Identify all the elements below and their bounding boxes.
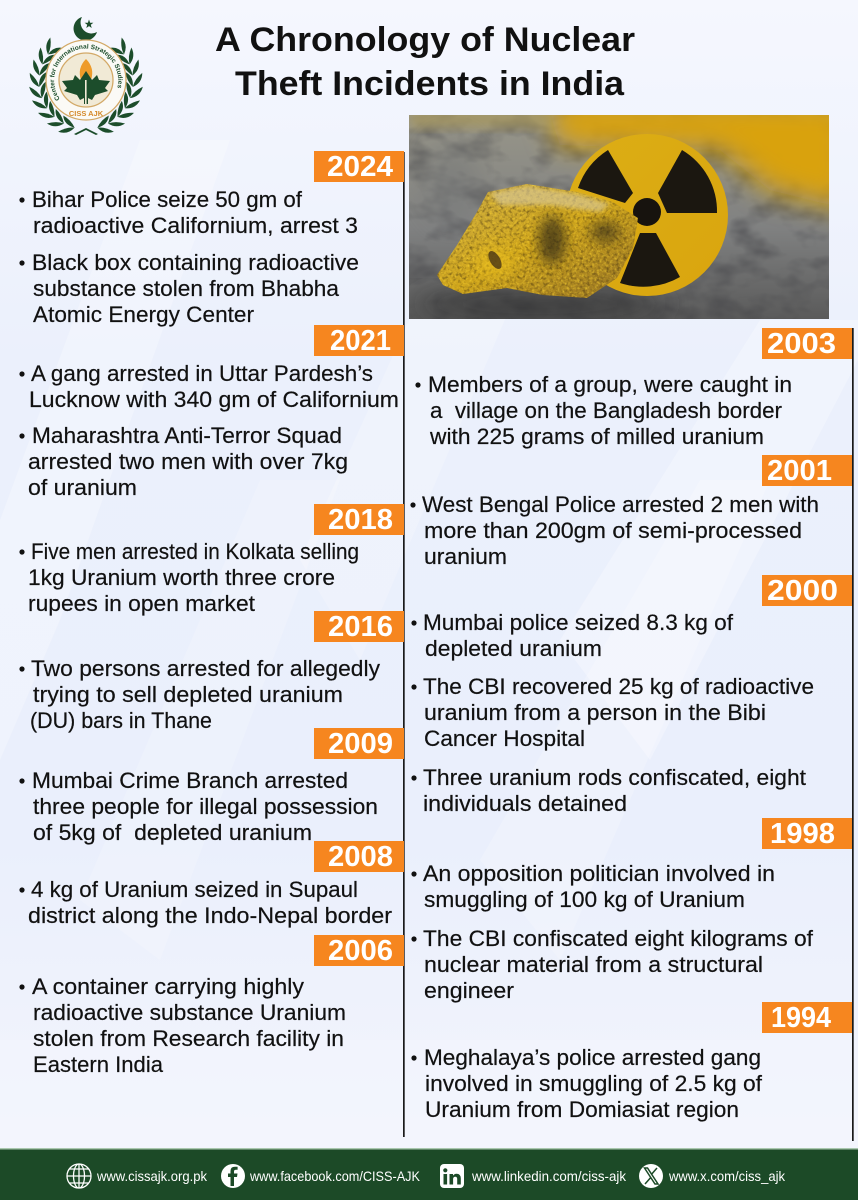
- entry: container: [19, 974, 346, 1077]
- entry: Thane: [19, 656, 381, 733]
- entry: CBI Bibi Cancer Hospital: Cancer Hospital: [424, 726, 585, 751]
- entry: Mumbai police: depleted uranium: [425, 636, 602, 661]
- logo: CISS AJK emblem: [29, 17, 143, 135]
- year 2009: 2009: [328, 728, 393, 760]
- entry: Bangladesh border: with 225 grams of milled uranium: [429, 424, 764, 449]
- entry: Black box: Atomic Energy Center: [33, 302, 255, 327]
- year 2008: 2008: [328, 841, 393, 873]
- entry: Maharashtra ATS: Maharashtra Anti-Terror Squad: [32, 423, 342, 448]
- entry: Maharashtra ATS: of uranium: [28, 475, 137, 500]
- icon: globe: [67, 1164, 91, 1188]
- year 2018: 2018: [328, 504, 393, 536]
- entry: Black box: [19, 250, 359, 327]
- entry: Mumbai Crime Branch: Mumbai Crime Branch arrested: [32, 768, 348, 793]
- icon: X: [639, 1164, 663, 1188]
- year 2003: 2003: [767, 328, 836, 360]
- entry: Mumbai Crime Branch: of 5kg of depleted uranium: [33, 820, 312, 845]
- icon: maple leaf and flame: [62, 59, 110, 105]
- year 1994: 1994: [771, 1002, 831, 1034]
- entry: Bihar Police: [19, 187, 358, 238]
- entry: container: radioactive substance Uranium: [33, 1000, 346, 1025]
- entry: uranium rods: [411, 765, 807, 816]
- entry: West Bengal: more than 200gm of semi-processed: [424, 518, 802, 543]
- entry: Kolkata: Five men arrested in Kolkata selling: [31, 539, 359, 564]
- entry: CBI structural engineer: engineer: [424, 978, 515, 1003]
- entry: Lucknow gang: A gang arrested in Uttar Pardesh’s: [31, 361, 373, 386]
- photo: uranium rock and radiation sign: [409, 115, 829, 319]
- year 2016: 2016: [328, 611, 393, 643]
- icon: linkedin: [440, 1164, 464, 1188]
- entry: CBI structural engineer: [411, 926, 814, 1003]
- title: [215, 21, 635, 103]
- entry: Meghalaya: [411, 1045, 763, 1122]
- entry: CBI Bibi Cancer Hospital: uranium from a person in the Bibi: [424, 700, 766, 725]
- entry: Bangladesh border: Members of a group, were caught in: [428, 372, 792, 397]
- title: Theft Incidents in India: [235, 65, 625, 103]
- entry: Supaul: district along the Indo-Nepal border: [28, 903, 393, 928]
- entry: West Bengal: West Bengal Police arrested 2 men with: [422, 492, 819, 517]
- entry: Meghalaya: involved in smuggling of 2.5 kg of: [425, 1071, 763, 1096]
- entry: Bangladesh border: a village on the Bangladesh border: [430, 398, 782, 423]
- entry: CBI structural engineer: The CBI confiscated eight kilograms of: [423, 926, 814, 951]
- entry: container: stolen from Research facility in: [33, 1026, 344, 1051]
- icon: facebook: [221, 1164, 245, 1188]
- entry: West Bengal: uranium: [424, 544, 507, 569]
- year 1998: 1998: [770, 818, 835, 850]
- entry: opposition politician: smuggling of 100 kg of Uranium: [424, 887, 745, 912]
- website link: www.cissajk.org.pk: [96, 1168, 208, 1184]
- entry: Mumbai police: [411, 610, 734, 661]
- entry: Bangladesh border: [415, 372, 792, 449]
- entry: Bihar Police: radioactive Californium, arrest 3: [33, 213, 358, 238]
- entry: Meghalaya: Meghalaya’s police arrested gang: [424, 1045, 761, 1070]
- footer bar: [0, 1148, 858, 1200]
- entry: CBI Bibi Cancer Hospital: [411, 674, 814, 751]
- entry: Meghalaya: Uranium from Domiasiat region: [425, 1097, 739, 1122]
- year 2006: 2006: [328, 935, 393, 967]
- entry: Bihar Police: Bihar Police seize 50 gm of: [32, 187, 303, 212]
- entry: Mumbai Crime Branch: [19, 768, 378, 845]
- entry: Lucknow gang: Lucknow with 340 gm of Californium: [29, 387, 399, 412]
- entry: Black box: substance stolen from Bhabha: [33, 276, 339, 301]
- entry: Kolkata: 1kg Uranium worth three crore: [28, 565, 335, 590]
- icon: laurel wreath: [29, 37, 143, 135]
- title: A Chronology of Nuclear: [215, 21, 635, 59]
- x link: www.x.com/ciss_ajk: [668, 1168, 786, 1184]
- entry: Maharashtra ATS: [19, 423, 348, 500]
- entry: Thane: trying to sell depleted uranium: [33, 682, 343, 707]
- year 2000: 2000: [767, 575, 838, 607]
- icon: seal ring: CISS AJK: [69, 109, 104, 118]
- timeline axis: left column: [403, 152, 405, 1137]
- icon: radiation trefoil sign: [566, 134, 728, 296]
- entry: uranium rods: Three uranium rods confiscated, eight: [423, 765, 807, 790]
- entry: Kolkata: rupees in open market: [28, 591, 256, 616]
- entry: Kolkata: [19, 539, 359, 616]
- entry: Thane: (DU) bars in Thane: [30, 708, 212, 733]
- timeline axis: right column: [852, 328, 854, 1141]
- facebook link: www.facebook.com/CISS-AJK: [249, 1168, 421, 1184]
- entry: Supaul: 4 kg of Uranium seized in Supaul: [31, 877, 358, 902]
- entry: Maharashtra ATS: arrested two men with over 7kg: [28, 449, 348, 474]
- entry: Mumbai Crime Branch: three people for illegal possession: [33, 794, 378, 819]
- entry: Black box: Black box containing radioactive: [32, 250, 359, 275]
- icon: uranium rock: [437, 184, 638, 298]
- entry: Lucknow gang: [19, 361, 399, 412]
- entry: CBI structural engineer: nuclear material from a structural: [424, 952, 763, 977]
- entry: container: Eastern India: [33, 1052, 163, 1077]
- icon: seal ring: [45, 39, 127, 121]
- entry: container: A container carrying highly: [32, 974, 305, 999]
- entry: CBI Bibi Cancer Hospital: The CBI recovered 25 kg of radioactive: [423, 674, 814, 699]
- entry: uranium rods: individuals detained: [423, 791, 627, 816]
- year 2021: 2021: [330, 325, 391, 357]
- entry: opposition politician: An opposition politician involved in: [423, 861, 775, 886]
- year 2024: 2024: [327, 151, 393, 183]
- icon: seal ring: Center for International Strategic Studies: [50, 44, 123, 100]
- linkedin link: www.linkedin.com/ciss-ajk: [471, 1168, 627, 1184]
- entry: Supaul: [19, 877, 393, 928]
- entry: Thane: Two persons arrested for allegedly: [31, 656, 381, 681]
- icon: crescent and star: [74, 17, 97, 40]
- entry: opposition politician: [411, 861, 775, 912]
- entry: Mumbai police: Mumbai police seized 8.3 kg of: [423, 610, 734, 635]
- entry: West Bengal: [410, 492, 819, 569]
- year 2001: 2001: [767, 455, 832, 487]
